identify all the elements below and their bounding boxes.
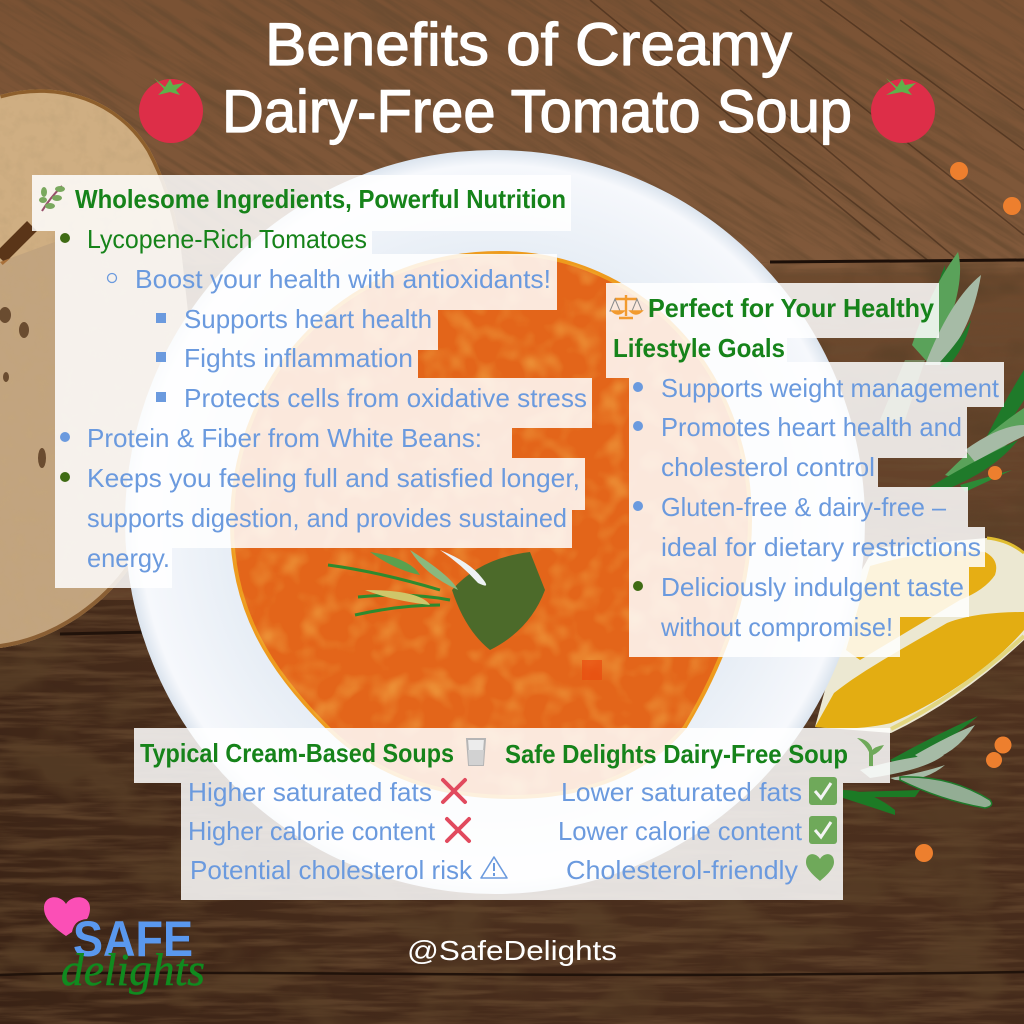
icon: tomato right	[871, 78, 935, 143]
heading: safe delights dairy-free soup: Safe Delights Dairy-Free Soup	[505, 739, 848, 769]
rosemary sprig: upper right	[880, 252, 1024, 492]
icon: green heart	[806, 854, 834, 881]
section: cream-based soups column: Higher calorie content	[188, 816, 436, 846]
bullet list: cholesterol control	[661, 452, 875, 482]
icon: pink heart	[44, 897, 90, 936]
heading: Wholesome Ingredients, Powerful Nutrition	[75, 184, 566, 214]
panel: wholesome ingredients backdrop	[32, 175, 592, 588]
heading: typical cream-based soups: Typical Cream-Based Soups	[140, 738, 454, 768]
bullet list: Supports weight management	[661, 373, 1000, 403]
title: Dairy-Free Tomato Soup	[222, 78, 852, 145]
handle: @SafeDelights: @SafeDelights	[407, 935, 617, 966]
heading: Perfect for Your Healthy	[648, 293, 935, 323]
bullet list: Protects cells from oxidative stress	[184, 383, 587, 413]
section: wholesome ingredients text	[39, 184, 587, 573]
logo: safe delights: delights	[61, 944, 205, 995]
bullet list: Fights inflammation	[184, 343, 413, 373]
title	[222, 11, 852, 145]
bullet list	[633, 373, 1000, 642]
lemon wedge	[815, 538, 1024, 733]
heading: Lifestyle Goals	[613, 333, 785, 363]
icon: seedling	[857, 738, 884, 766]
icon: green check box	[809, 777, 837, 805]
bullet list: Gluten-free & dairy-free –	[661, 492, 947, 522]
section: cream-based soups column: Potential cholesterol risk	[190, 855, 473, 885]
icon: balance scales	[610, 295, 642, 318]
rosemary sprig: lower right	[843, 716, 992, 815]
bullet list: without compromise!	[660, 612, 893, 642]
icon: red cross	[447, 819, 469, 841]
lentils scattered on the table	[915, 162, 1021, 862]
logo: safe delights: SAFE	[73, 911, 193, 967]
icon: herb sprig	[39, 186, 65, 211]
bullet list: Lycopene-Rich Tomatoes	[87, 224, 367, 254]
icon: tomato left	[139, 78, 203, 143]
bullet list: Promotes heart health and	[661, 412, 962, 442]
section: safe delights soup column	[505, 738, 884, 885]
icon: red cross	[443, 780, 465, 802]
bullet list: Keeps you feeling full and satisfied longer,	[87, 463, 580, 493]
section: safe delights soup column: Lower saturated fats	[561, 777, 802, 807]
bullet list: Protein & Fiber from White Beans:	[87, 423, 482, 453]
panel: healthy lifestyle backdrop	[606, 283, 1004, 657]
herb garnish in the soup	[328, 550, 545, 650]
icon: warning triangle	[481, 857, 507, 878]
logo: safe delights	[44, 897, 205, 995]
tomato lentil soup	[220, 240, 760, 810]
panel: soup comparison backdrop	[134, 728, 890, 900]
icon: green check box	[809, 816, 837, 844]
section: safe delights soup column: Cholesterol-friendly	[566, 855, 798, 885]
bullet list: Boost your health with antioxidants!	[135, 264, 551, 294]
section: safe delights soup column: Lower calorie content	[558, 816, 803, 846]
icon: glass of milk	[467, 739, 485, 765]
bullet list: energy.	[87, 543, 170, 573]
bread slices	[0, 89, 188, 648]
heading	[613, 293, 935, 363]
bullet list	[60, 224, 587, 573]
section: healthy lifestyle text	[610, 293, 1000, 642]
section: cream-based soups column: Higher saturated fats	[188, 777, 432, 807]
bullet list: ideal for dietary restrictions	[661, 532, 981, 562]
white plate	[125, 150, 865, 894]
bullet list: Deliciously indulgent taste	[661, 572, 964, 602]
title: Benefits of Creamy	[265, 11, 792, 78]
bullet list: supports digestion, and provides sustained	[87, 503, 567, 533]
section: cream-based soups column	[140, 738, 507, 885]
bullet list: Supports heart health	[184, 304, 432, 334]
